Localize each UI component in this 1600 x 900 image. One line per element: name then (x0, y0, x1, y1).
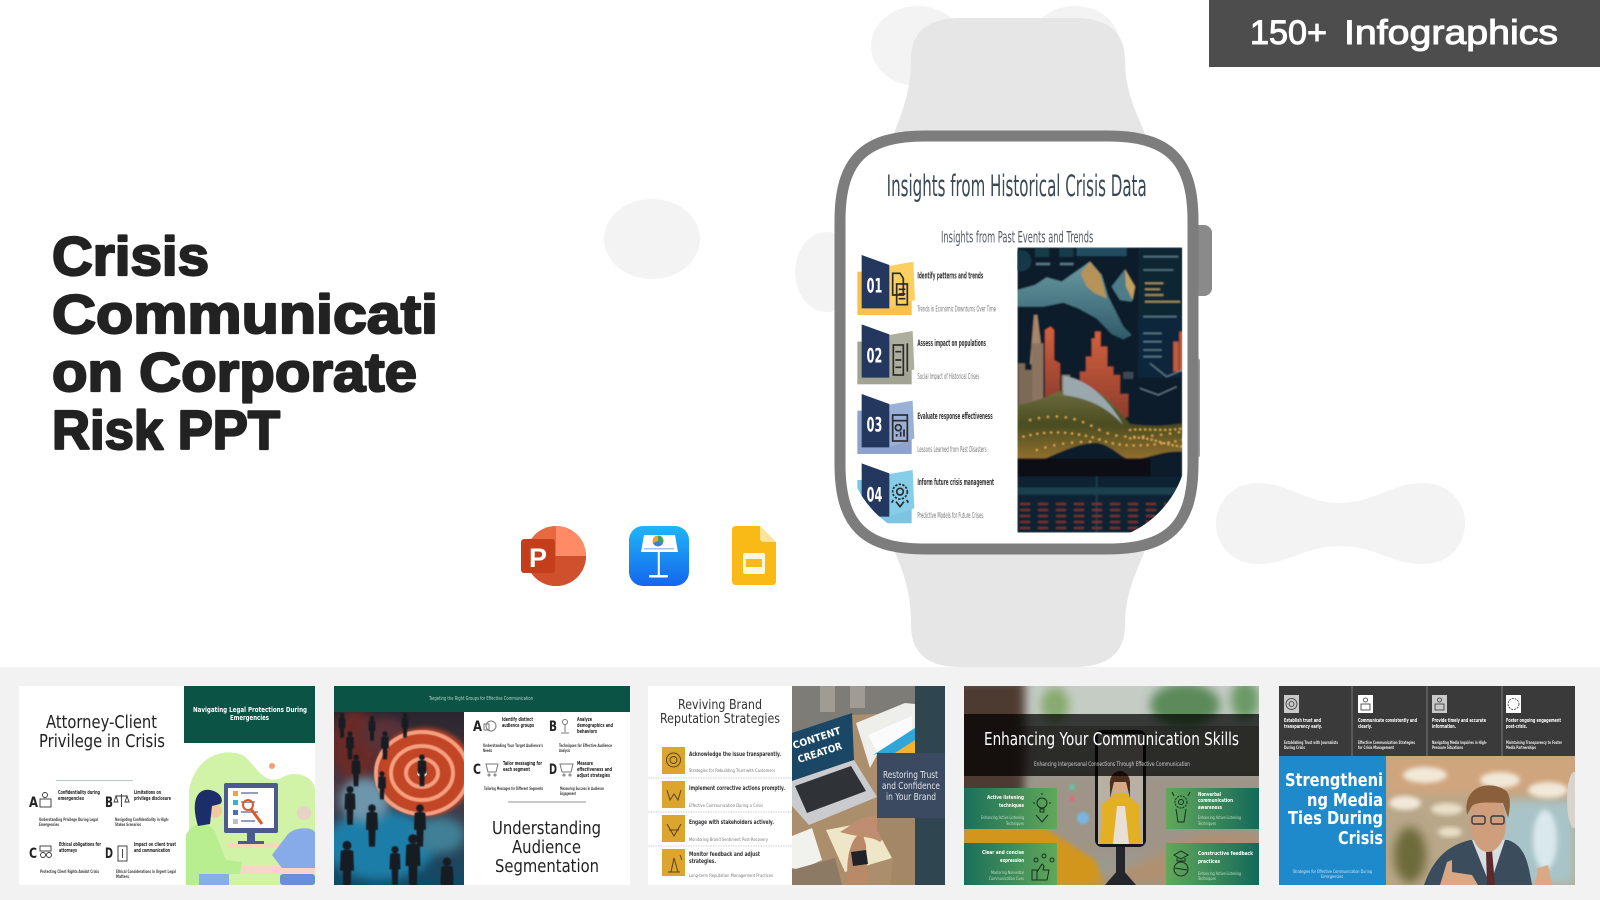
items A-D: B (105, 795, 113, 811)
blue title panel: Strengtheni (1285, 770, 1383, 791)
card: Nonverbal communication: Enhancing Active Listening (1198, 815, 1241, 820)
watch band: bottom (893, 548, 1146, 667)
item 03: Lessons Learned from Past Disasters (917, 445, 987, 454)
items A-D: privilege disclosure (134, 796, 171, 802)
items A-D: Analysis (559, 748, 570, 753)
item 01: Identify patterns and trends (917, 271, 983, 281)
dark top panel: Establishing Trust with Journalists (1284, 740, 1338, 745)
card: Nonverbal communication: awareness (1198, 805, 1222, 811)
slide title: Segmentation (495, 856, 599, 877)
item 01 (857, 255, 996, 315)
strategy list: Effective Communication During a Crisis (689, 803, 763, 809)
blue title panel: Ties During (1288, 808, 1383, 829)
photo: target and crowd (334, 712, 464, 885)
thumbnail 2: Understanding Audience Segmentation (325, 686, 630, 900)
watch band: top (893, 18, 1146, 136)
dark top panel: post-crisis. (1506, 724, 1527, 730)
dark top panel: During Crisis (1284, 745, 1305, 750)
blue title panel (1279, 756, 1386, 885)
watch screen content: Evaluate response effectiveness (917, 412, 993, 422)
items A-D: effectiveness and (577, 767, 612, 773)
dark top panel: Foster ongoing engagement (1506, 718, 1561, 724)
title (52, 225, 438, 461)
items A-D: Matters (116, 874, 129, 879)
dark side column (915, 686, 945, 885)
items A-D: Ethical Considerations in Urgent Legal (116, 869, 176, 874)
dark top panel: Establish trust and (1284, 718, 1321, 724)
dark top panel: Maintaining Transparency to Foster (1506, 740, 1562, 745)
slide title: Audience (512, 837, 581, 858)
dark top panel: Effective Communication Strategies (1358, 740, 1415, 745)
screen heading: Insights from Historical Crisis Data (887, 169, 1147, 203)
notebook, papers and hands (792, 828, 822, 870)
strategy list: Strategies for Rebuilding Trust with Customers (689, 768, 775, 774)
title: Crisis (52, 225, 209, 287)
items A-D: D (549, 762, 557, 778)
icon: Keynote (629, 526, 689, 586)
items A-D: Limitations on (134, 790, 161, 796)
phone on tripod (1095, 730, 1146, 885)
slide title: Reviving Brand (678, 697, 762, 713)
items A-D: Confidentiality during (58, 790, 100, 796)
item 03 (857, 394, 993, 454)
header text: Navigating Legal Protections During (193, 706, 307, 714)
card: Constructive feedback (1166, 843, 1259, 885)
card: Constructive feedback: practices (1198, 859, 1220, 865)
title: on Corporate (52, 341, 417, 403)
strategy list: Monitoring Brand Sentiment Post-Recovery (689, 837, 768, 843)
watch screen background (840, 136, 1193, 549)
dark top panel: for Crisis Management (1358, 745, 1394, 750)
items A-D: Tailoring Messages for Different Segments (484, 786, 543, 791)
items A-D: Techniques for Effective Audience (559, 743, 612, 748)
slide title: Understanding (492, 818, 601, 839)
items A-D: demographics and (577, 723, 613, 729)
items A-D: behaviors (577, 729, 597, 735)
watch screen content: Inform future crisis management (917, 478, 994, 488)
card: Clear and concise: Mastering Nonverbal (991, 870, 1024, 875)
item 03: 03 (867, 414, 882, 437)
icon: PowerPoint (521, 526, 586, 586)
card: Clear and concise: Communication Cues (989, 876, 1024, 881)
watch side button (1194, 358, 1200, 458)
decorative background blobs (604, 6, 1465, 564)
items A-D: Impact on client trust (134, 842, 176, 848)
items A-D: each segment (503, 767, 530, 773)
card: Constructive feedback: Constructive feedback (1198, 851, 1253, 857)
icon: Google Slides (732, 526, 776, 585)
items A-D: and communication (134, 848, 170, 854)
dark top panel (1279, 686, 1575, 756)
slide title: Attorney-Client (46, 712, 157, 733)
item 02: 02 (867, 344, 882, 367)
photo: laptop and calendar desk (792, 686, 945, 885)
items A-D: Measuring Success in Audience (560, 786, 604, 791)
items A-D: Identify distinct (502, 717, 533, 723)
blue title panel: ng Media (1307, 790, 1383, 811)
header text (193, 706, 307, 722)
title: Communicati (52, 283, 438, 345)
card: Active listening: Techniques (1005, 821, 1024, 826)
header text: Emergencies (230, 714, 269, 722)
watch case frame (840, 136, 1193, 549)
items A-D: D (105, 846, 113, 862)
data landscape image (1010, 247, 1182, 533)
item 02 (857, 324, 986, 384)
callout: Restoring Trust (877, 753, 945, 818)
dark top panel: Provide timely and accurate (1432, 718, 1486, 724)
card: Active listening (964, 788, 1057, 829)
dark top panel: clearly. (1358, 724, 1372, 730)
card: Nonverbal communication: communication (1198, 798, 1233, 804)
items A-D: adjust strategies (577, 773, 610, 779)
strategy list: strategies. (689, 859, 716, 865)
slide title: Privilege in Crisis (39, 731, 165, 752)
strategy list (648, 747, 792, 879)
thumbnail 4: Enhancing Communication Skills (950, 680, 1259, 885)
items A-D (29, 790, 176, 879)
photo: man speaking (1386, 750, 1581, 885)
screen subheading: Insights from Past Events and Trends (941, 227, 1093, 246)
dark top panel: transparency early. (1284, 724, 1322, 730)
items A-D: attorneys (59, 848, 77, 854)
icon: PowerPoint: P (529, 543, 547, 573)
items A-D: Protecting Client Rights Amidst Crisis (40, 869, 99, 874)
desk calendar (856, 703, 915, 768)
thumbnail 5: Strengthening Media Ties (1279, 686, 1581, 885)
strategy list: Monitor feedback and adjust (689, 852, 760, 858)
thumbnail 1: Attorney-Client Privilege (19, 686, 315, 885)
strategy list: Acknowledge the issue transparently. (689, 752, 781, 758)
card: Clear and concise (964, 843, 1057, 885)
dark top panel: Media Partnerships (1506, 745, 1536, 750)
strategy list: Engage with stakeholders actively. (689, 820, 774, 826)
thumbnail strip background (0, 667, 1600, 900)
badge: 150+ Infographics: 150+ (1250, 14, 1327, 52)
blurred room photo (950, 680, 1259, 885)
blue title panel: Strategies for Effective Communication During (1293, 869, 1372, 875)
photo: laptop and calendar desk: CONTENT (792, 726, 843, 752)
items A-D: Analyze (577, 717, 592, 723)
items A-D: Measure (577, 761, 593, 767)
card: Active listening: Active listening (987, 795, 1024, 801)
items A-D (473, 717, 613, 796)
card: Active listening: techniques (999, 803, 1024, 809)
items A-D: Tailor messaging for (503, 761, 542, 767)
items A-D: Ethical obligations for (59, 842, 101, 848)
badge: 150+ Infographics (1209, 0, 1600, 67)
card: Nonverbal communication: Techniques (1197, 821, 1216, 826)
callout: Restoring Trust: and Confidence (882, 781, 940, 792)
items A-D: C (473, 762, 481, 778)
watch screen content: Assess impact on populations (917, 339, 986, 349)
card: Active listening: Enhancing Active Listening (981, 815, 1024, 820)
card: Nonverbal communication (1166, 788, 1259, 829)
thumbnail 3: Reviving Brand Reputation (648, 686, 945, 885)
blue title panel: Crisis (1338, 828, 1383, 849)
slide title (492, 818, 601, 877)
item 04: 04 (867, 483, 882, 506)
items A-D: Navigating Confidentiality in High- (115, 817, 169, 822)
header text: Targeting the Right Groups for Effective Communication (428, 696, 533, 702)
green header (334, 686, 630, 712)
watch (840, 18, 1212, 667)
photo: laptop and calendar desk: CREATOR (797, 741, 844, 766)
callout: Restoring Trust: in Your Brand (886, 792, 936, 803)
slide subtitle: Enhancing Interpersonal Connections Through Effective Communication (1034, 761, 1190, 768)
items A-D: emergencies (58, 796, 84, 802)
items A-D: Stakes Scenarios (115, 822, 141, 827)
items A-D: A (29, 795, 38, 811)
items A-D: audience groups (502, 723, 534, 729)
dark top panel: information. (1432, 724, 1456, 730)
item 02: Social Impact of Historical Crises (917, 372, 979, 381)
green header (184, 686, 315, 743)
strategy list: Implement corrective actions promptly. (689, 786, 785, 792)
dark top panel: Navigating Media Inquiries in High- (1432, 740, 1487, 745)
slide title (660, 697, 780, 727)
items A-D: C (29, 846, 37, 862)
dark top panel: Pressure Situations (1432, 745, 1463, 750)
badge: 150+ Infographics: Infographics (1344, 14, 1558, 52)
slide title: Reputation Strategies (660, 711, 780, 727)
items A-D: A (473, 719, 482, 735)
card: Constructive feedback: Enhancing Active Listening (1198, 871, 1241, 876)
item 01: 01 (867, 275, 882, 298)
card: Constructive feedback: Techniques (1197, 876, 1216, 881)
slide title (39, 712, 165, 752)
card: Clear and concise: Clear and concise (982, 850, 1024, 856)
items A-D: Needs (483, 748, 492, 753)
watch crown (1192, 225, 1212, 296)
items A-D: Emergencies (39, 822, 59, 827)
title: Risk PPT (52, 399, 280, 461)
card: Nonverbal communication: Nonverbal (1198, 792, 1221, 798)
watch screen content (857, 169, 1182, 533)
watch screen content: Trends in Economic Downturns Over Time (917, 305, 996, 314)
blue title panel: Emergencies (1321, 874, 1343, 880)
item 04: Predictive Models for Future Crises (917, 511, 983, 520)
slide title: Enhancing Your Communication Skills (984, 729, 1239, 750)
items A-D: B (549, 719, 557, 735)
card: Clear and concise: expression (1000, 858, 1024, 864)
items A-D: Understanding Privilege During Legal (39, 817, 98, 822)
callout: Restoring Trust: Restoring Trust (883, 770, 938, 781)
item 04 (857, 463, 994, 523)
dark top panel: Communicate consistently and (1358, 718, 1417, 724)
illustration: people at monitor (186, 752, 315, 885)
items A-D: Understanding Your Target Audience's (483, 743, 543, 748)
laptop (792, 713, 854, 781)
items A-D: Engagement (560, 791, 576, 796)
strategy list: Long-term Reputation Management Practices (689, 873, 773, 879)
